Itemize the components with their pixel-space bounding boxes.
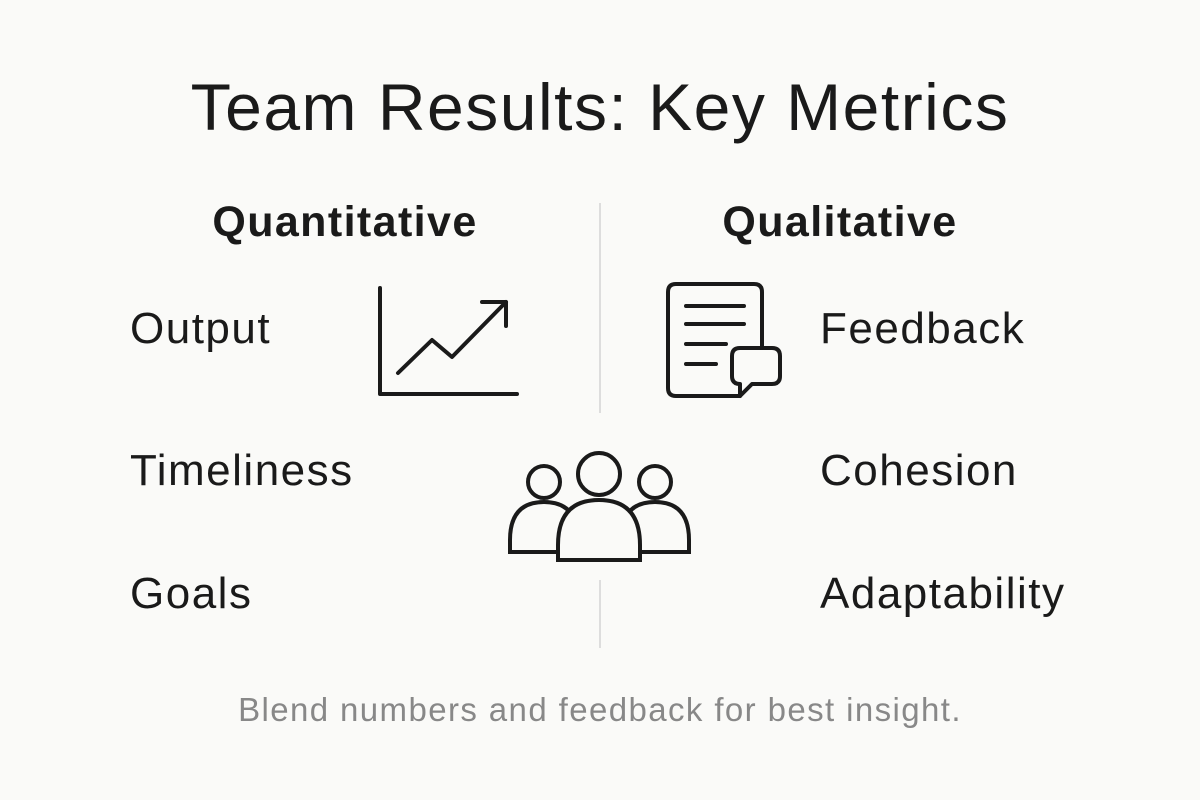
label: timeliness: Timeliness [130,446,354,495]
title: Team Results: Key Metrics [191,70,1009,144]
divider top [599,203,601,413]
label: adaptability: Adaptability [820,569,1065,618]
label: cohesion: Cohesion [820,446,1018,495]
label: output: Output [130,304,271,353]
heading: qualitative: Qualitative [722,198,958,246]
label: feedback: Feedback [820,304,1025,353]
icon: document with speech bubble [666,282,782,398]
heading: quantitative: Quantitative [212,198,478,246]
label: goals: Goals [130,569,252,618]
icon: team people [508,451,691,562]
divider bottom [599,580,601,648]
icon: line chart [378,286,519,396]
footer caption: Blend numbers and feedback for best insight. [238,691,962,728]
